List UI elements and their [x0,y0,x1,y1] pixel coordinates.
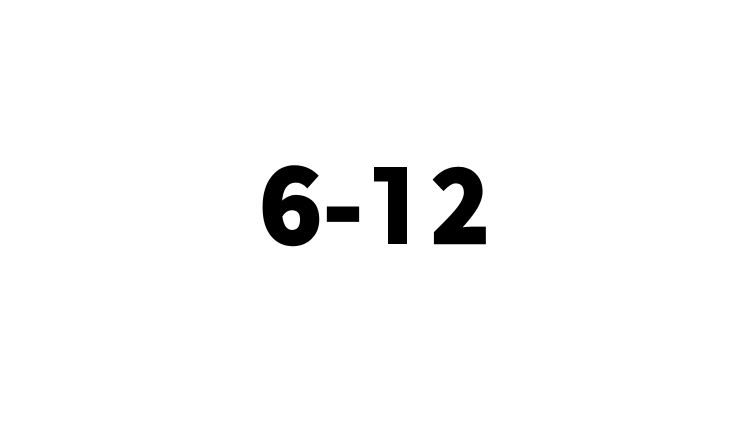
title: 6-12 [262,165,486,246]
title: 6-12: 1 [361,121,426,276]
title: 6-12: 2 [431,125,490,273]
title: 6-12: 6 [259,124,322,273]
title: 6-12: - [322,121,363,276]
